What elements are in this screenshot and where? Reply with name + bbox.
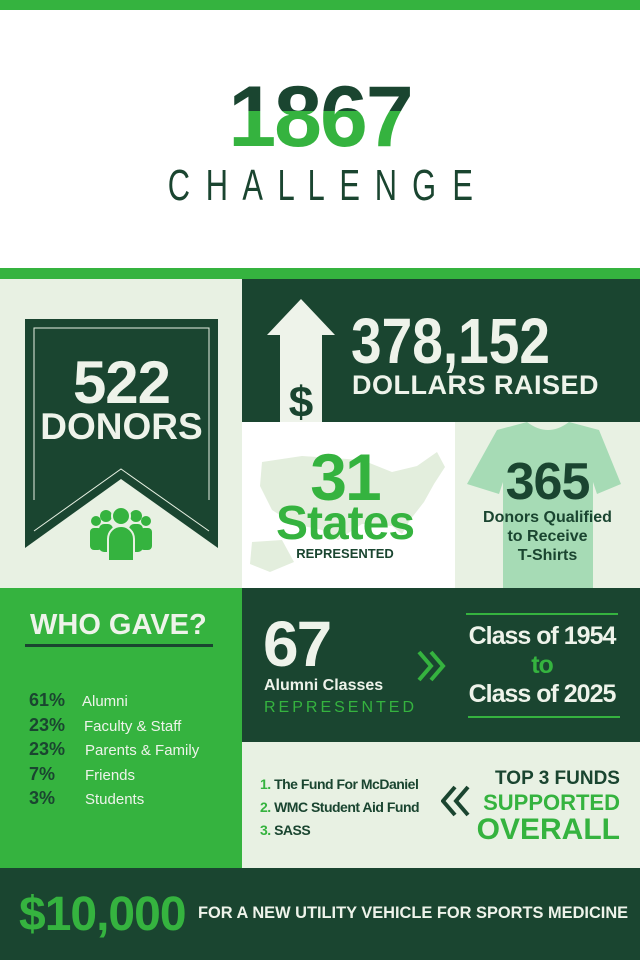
panel: top funds: OVERALL: [477, 813, 620, 846]
panel: top funds: 2. WMC Student Aid Fund: [260, 799, 419, 815]
panel: t-shirts: [455, 422, 640, 588]
icon: people: [90, 508, 152, 560]
footer: $10,000: [19, 888, 186, 941]
panel: t-shirts: T-Shirts: [518, 547, 577, 564]
panel: states: REPRESENTED: [296, 546, 394, 561]
title: CHALLENGE: A: [243, 161, 263, 210]
522 donors text: 522: [73, 349, 170, 416]
map: [250, 452, 445, 572]
panel: states: [242, 422, 455, 588]
list: 23%: [29, 715, 65, 735]
list: Students: [85, 791, 144, 808]
list: 7%: [29, 764, 55, 784]
title: CHALLENGE: E: [339, 161, 359, 210]
panel: who gave: [0, 588, 242, 868]
list: Alumni: [82, 693, 128, 710]
panel: t-shirts: 365: [506, 453, 589, 511]
panel: dollars raised: DOLLARS RAISED: [352, 370, 599, 400]
panel: states: States: [276, 497, 414, 550]
list: 61%: [29, 690, 65, 710]
icon: up arrow with dollar: [267, 299, 335, 422]
amount: 378,152: [351, 305, 550, 377]
top bar: [0, 0, 640, 10]
list: 23%: [29, 739, 65, 759]
icon: chevrons left: [441, 786, 470, 816]
title: CHALLENGE: C: [168, 161, 190, 210]
title: CHALLENGE: N: [375, 161, 397, 210]
footer: [0, 868, 640, 960]
panel: dollars raised: [242, 279, 640, 422]
panel: t-shirts: to Receive: [507, 528, 588, 545]
list: Faculty & Staff: [84, 718, 181, 735]
title: CHALLENGE: L: [308, 161, 325, 210]
class range: Class of 2025: [469, 680, 615, 708]
panel: donors: [0, 279, 242, 588]
list: 3%: [29, 788, 55, 808]
panel: top funds: TOP 3 FUNDS: [495, 768, 620, 789]
panel: top funds: 3. SASS: [260, 822, 310, 838]
title: CHALLENGE: H: [205, 161, 228, 210]
banner: [25, 319, 218, 548]
panel: alumni classes: REPRESENTED: [264, 699, 417, 716]
panel: alumni classes: [242, 588, 640, 742]
title: CHALLENGE: L: [277, 161, 294, 210]
panel: alumni classes: Alumni Classes: [264, 677, 383, 694]
class range: Class of 1954: [469, 622, 615, 650]
icon: t-shirt: [467, 422, 621, 588]
icon: chevrons right: [418, 650, 446, 682]
list: Friends: [85, 767, 135, 784]
panel: alumni classes: 67: [263, 608, 330, 680]
title: CHALLENGE: [168, 161, 473, 210]
panel: donors: DONORS: [40, 406, 203, 447]
panel: top funds: SUPPORTED: [483, 790, 620, 815]
panel: who gave: WHO GAVE?: [30, 609, 207, 641]
class range: to: [531, 651, 553, 679]
title: CHALLENGE: G: [413, 161, 437, 210]
panel: top funds: [242, 742, 640, 868]
panel: t-shirts: Donors Qualified: [483, 509, 612, 526]
list: [29, 690, 200, 808]
class range: [469, 622, 616, 708]
panel: states: 31: [310, 440, 380, 514]
footer: FOR A NEW UTILITY VEHICLE FOR SPORTS MEDICINE: [198, 904, 628, 922]
title: CHALLENGE: E: [452, 161, 473, 210]
list: Parents & Family: [85, 742, 199, 759]
panel: top funds: 1. The Fund For McDaniel: [260, 776, 418, 792]
title: 1867: 1867: [228, 69, 412, 165]
divider bar: [0, 268, 640, 279]
